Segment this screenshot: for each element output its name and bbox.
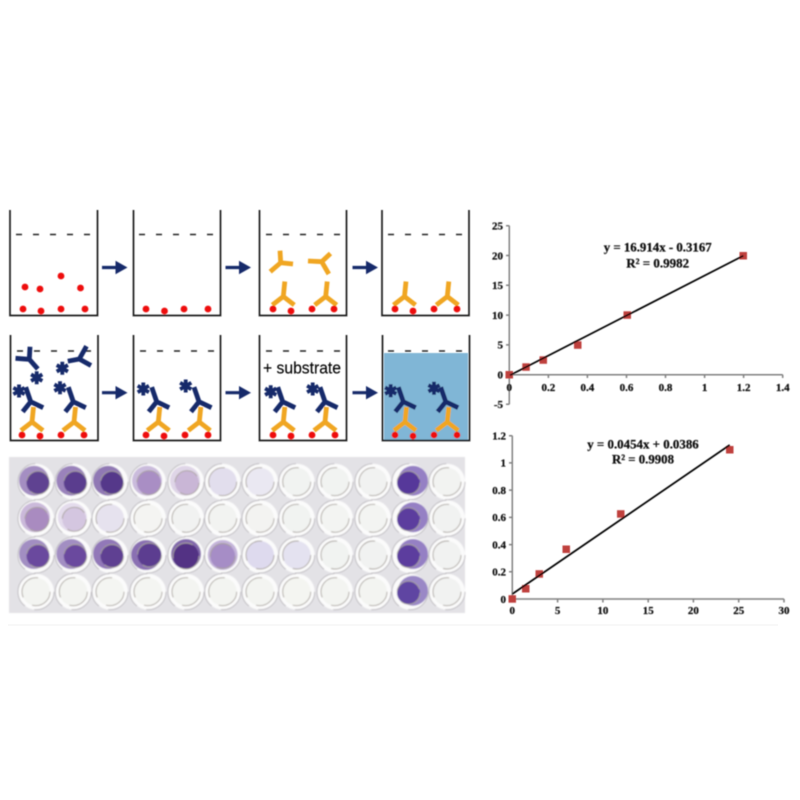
x axis labels: 10 — [597, 605, 609, 617]
y axis labels: 25 — [492, 220, 504, 232]
panel: ELISA steps diagram — [10, 210, 470, 440]
x axis labels: 0.6 — [620, 382, 634, 394]
x axis labels: 25 — [733, 605, 745, 617]
plate row 1 — [18, 464, 465, 500]
y axis labels: 1.2 — [492, 430, 506, 442]
y axis labels: 15 — [492, 280, 504, 292]
well 5: enzyme-linked secondary antibody added — [10, 335, 98, 440]
x axis labels: 0 — [510, 605, 516, 617]
axes — [509, 436, 784, 602]
chart: bottom standard curve — [492, 430, 790, 617]
label: plus substrate: + substrate — [263, 358, 341, 378]
arrow 4 — [102, 386, 128, 399]
equation: R² = 0.9908 — [612, 451, 674, 466]
well 6: bound secondary antibody — [134, 335, 220, 440]
well 1: sample with antigen — [10, 210, 98, 316]
y axis labels: 5 — [498, 340, 504, 352]
x axis labels: 1.2 — [737, 382, 751, 394]
x axis labels — [507, 382, 790, 394]
axes — [506, 226, 783, 404]
arrow 6 — [352, 386, 378, 399]
y axis labels: 0 — [498, 370, 504, 382]
plate row 2 — [18, 500, 465, 536]
y axis labels: 20 — [492, 250, 504, 262]
equation: y = 16.914x - 0.3167 — [604, 239, 712, 254]
x axis labels: 1.4 — [776, 382, 790, 394]
equation: R² = 0.9982 — [626, 255, 689, 270]
well 7: substrate added — [260, 335, 346, 440]
x axis labels: 1 — [702, 382, 707, 394]
trend line — [510, 256, 743, 375]
y axis labels: 0.6 — [492, 512, 506, 524]
well 8: colour developed — [382, 335, 470, 440]
data points — [506, 252, 747, 378]
well 4: bound primary antibody — [382, 210, 469, 316]
x axis labels: 0.8 — [659, 382, 673, 394]
equation — [604, 239, 712, 270]
y axis labels: -5 — [494, 399, 503, 411]
trend line — [512, 445, 730, 594]
x axis labels: 15 — [643, 605, 654, 617]
x axis labels: 5 — [555, 605, 561, 617]
y axis labels: 0.2 — [492, 567, 506, 579]
x axis labels: 30 — [778, 605, 790, 617]
arrow 1 — [102, 261, 128, 274]
y axis labels: 0.8 — [492, 485, 506, 497]
y axis labels: 0 — [500, 594, 506, 606]
y axis labels — [492, 430, 506, 606]
well 2: bound antigen — [134, 210, 220, 316]
data points — [508, 446, 734, 603]
x axis labels — [510, 605, 790, 617]
panel: microplate photo — [9, 457, 465, 613]
y axis labels — [492, 220, 504, 411]
equation — [587, 436, 699, 466]
x axis labels: 0.4 — [581, 382, 595, 394]
x axis labels: 0.2 — [542, 382, 556, 394]
plate row 4 — [18, 574, 465, 610]
arrow 5 — [226, 386, 251, 399]
y axis labels: 0.4 — [492, 539, 506, 551]
well 3: primary antibody added — [260, 210, 346, 316]
x axis labels: 20 — [688, 605, 699, 617]
equation: y = 0.0454x + 0.0386 — [587, 436, 699, 451]
y axis labels: 1 — [500, 458, 506, 470]
arrow 2 — [226, 261, 251, 274]
plate row 3 — [18, 537, 465, 573]
chart: top standard curve — [492, 220, 790, 411]
y axis labels: 10 — [492, 310, 504, 322]
x axis labels: 0 — [507, 382, 513, 394]
arrow 3 — [352, 261, 378, 274]
